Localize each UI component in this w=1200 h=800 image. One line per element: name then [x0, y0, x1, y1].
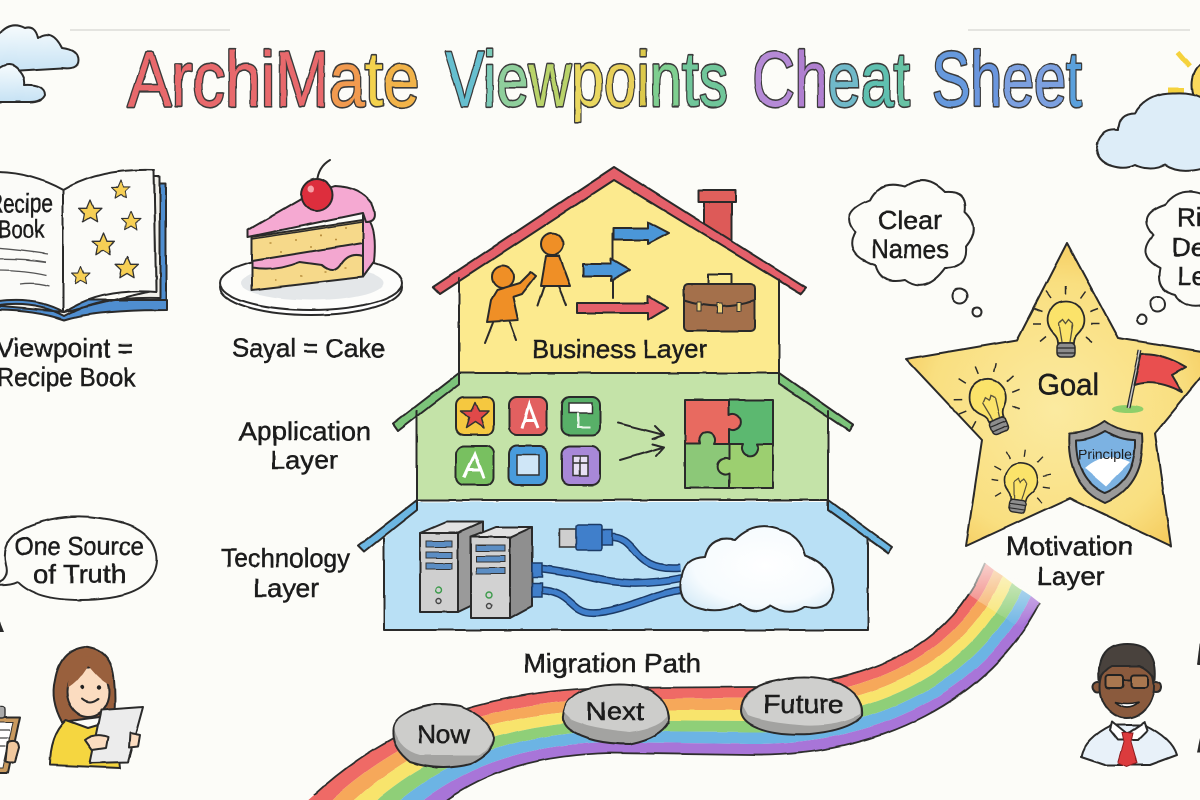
icon: clipboard person	[0, 622, 20, 773]
stone: future	[741, 677, 862, 734]
icon: sun and cloud top right	[1097, 52, 1200, 171]
label: application layer	[239, 416, 371, 475]
speech bubble: one source of truth: of Truth	[33, 559, 126, 589]
roof	[433, 167, 806, 294]
label: technology layer	[221, 543, 350, 603]
caption: viewpoint = recipe book: Viewpoint =	[0, 333, 133, 363]
title: ArchiMate	[128, 35, 419, 123]
cables and plug	[532, 525, 682, 613]
stone: next	[563, 684, 669, 744]
label: application layer: Layer	[270, 445, 338, 475]
figure: woman with tablet	[50, 647, 143, 768]
panel: viewpoint recipe book	[0, 170, 167, 392]
icon: principle shield: Principle	[1078, 447, 1132, 462]
stone: next: Next	[586, 696, 645, 726]
icon: bulb top	[1033, 286, 1099, 357]
arrows: business flows	[577, 222, 669, 320]
thought bubble: clear names: Names	[871, 234, 949, 264]
icon: servers	[420, 522, 532, 618]
icon: cake slice	[220, 160, 402, 315]
icon: bulb left	[945, 354, 1032, 445]
arrows: apps to puzzle	[618, 423, 664, 460]
label: motivation layer: Layer	[1037, 561, 1104, 591]
star	[906, 243, 1200, 546]
panel: technology layer	[221, 500, 892, 630]
caption: viewpoint = recipe book	[0, 333, 136, 392]
icon: bulb bottom	[987, 446, 1055, 517]
thought bubble: clear names	[849, 181, 982, 316]
stone: future: Future	[763, 689, 844, 719]
panel: migration rainbow path	[296, 555, 1048, 800]
label: business layer: Business Layer	[532, 334, 707, 364]
figure: man with tie	[1081, 644, 1177, 767]
label: technology layer: Technology	[221, 543, 350, 573]
title: Cheat	[752, 35, 910, 123]
stone: now: Now	[417, 719, 470, 749]
figures: two people	[485, 233, 570, 343]
application icons	[456, 397, 600, 485]
panel: sayal cake	[220, 160, 402, 363]
panel: application layer	[239, 373, 853, 500]
icon: clouds top left	[0, 25, 78, 102]
speech bubble: one source of truth: One Source	[15, 531, 144, 561]
label: migration path: Migration Path	[523, 648, 701, 678]
rainbow bands	[296, 563, 1040, 800]
panel: motivation layer	[906, 243, 1200, 591]
label: motivation layer: Motivation	[1006, 531, 1133, 561]
roof	[358, 500, 892, 553]
label: motivation layer	[1006, 531, 1133, 591]
decorative figure edges right	[1197, 640, 1200, 752]
label: goal: Goal	[1037, 367, 1099, 402]
thought bubble: clear names: Clear	[878, 205, 942, 235]
icon: open book	[0, 170, 167, 320]
title: Sheet	[932, 35, 1082, 123]
icon: briefcase	[684, 274, 755, 331]
title: Viewpoints	[445, 35, 728, 123]
label: application layer: Application	[239, 416, 371, 446]
icon: puzzle	[685, 400, 773, 488]
stone: now	[393, 704, 494, 768]
panel: business layer	[433, 167, 806, 373]
icon: chimney	[698, 190, 736, 250]
book cover text	[0, 188, 53, 244]
panel: layered house	[221, 167, 892, 630]
caption: sayal = cake: Sayal = Cake	[232, 333, 385, 363]
icon: principle shield	[1069, 421, 1142, 503]
title	[128, 35, 1082, 123]
thought bubble: right detail level	[1138, 192, 1200, 324]
icon: cloud	[680, 527, 834, 612]
speech bubble: one source of truth	[0, 516, 157, 600]
caption: viewpoint = recipe book: Recipe Book	[0, 362, 136, 392]
label: technology layer: Layer	[253, 573, 319, 603]
icon: goal flag	[1112, 350, 1186, 413]
roof	[393, 373, 853, 431]
